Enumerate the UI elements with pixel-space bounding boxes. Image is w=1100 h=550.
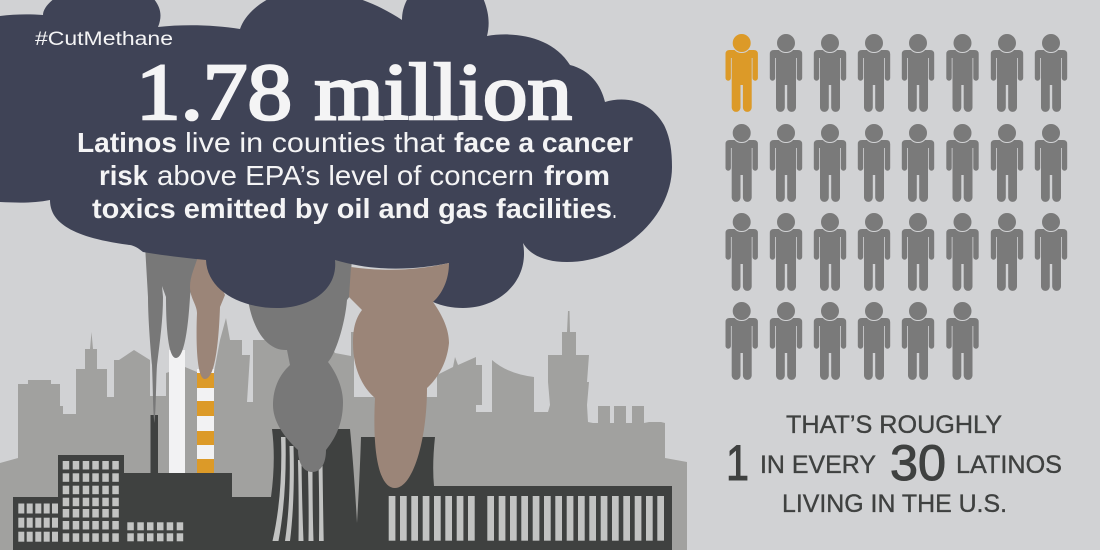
city skyline — [0, 311, 687, 550]
dark factory buildings — [13, 415, 672, 550]
body statement: from — [544, 160, 610, 191]
body statement: face a cancer — [454, 127, 633, 158]
body statement — [77, 127, 633, 224]
body statement: . — [612, 193, 617, 224]
icons: grey people row 2 — [726, 124, 1067, 202]
pictogram: 30 people, one highlighted — [726, 34, 1067, 380]
headline number: 1.78 million — [136, 49, 572, 137]
ratio statement: IN EVERY — [760, 451, 876, 479]
body statement: live in counties that — [185, 127, 445, 158]
tall building windows — [63, 461, 119, 542]
icons: grey people row 1 — [770, 34, 1067, 112]
body statement: Latinos — [77, 127, 177, 158]
white chimney — [169, 350, 185, 474]
ratio statement — [726, 411, 1062, 518]
body statement: risk — [99, 160, 149, 191]
body statement: toxics emitted by oil and gas facilities — [92, 193, 612, 224]
ratio statement: 30 — [890, 435, 946, 491]
methane cloud — [0, 0, 672, 308]
body statement: above EPA’s level of concern — [157, 160, 534, 191]
icon: highlighted person — [726, 34, 758, 112]
hashtag: #CutMethane — [35, 29, 173, 50]
grey smoke plumes left — [145, 245, 200, 423]
icons: grey people row 3 — [726, 212, 1067, 291]
low building windows — [127, 522, 183, 541]
cooling tower stripes — [272, 437, 324, 541]
central grey smoke plume — [248, 255, 352, 472]
brown smoke plume small — [190, 250, 225, 379]
ratio statement: 1 — [726, 435, 749, 491]
icons: grey people row 4 — [726, 302, 979, 380]
ratio statement: LIVING IN THE U.S. — [782, 490, 1007, 518]
large brown smoke plume — [349, 263, 449, 488]
striped orange chimney — [197, 369, 214, 474]
left building windows — [18, 504, 58, 542]
long building windows — [389, 496, 664, 541]
ratio statement: THAT’S ROUGHLY — [786, 411, 1002, 439]
ratio statement: LATINOS — [956, 451, 1062, 479]
